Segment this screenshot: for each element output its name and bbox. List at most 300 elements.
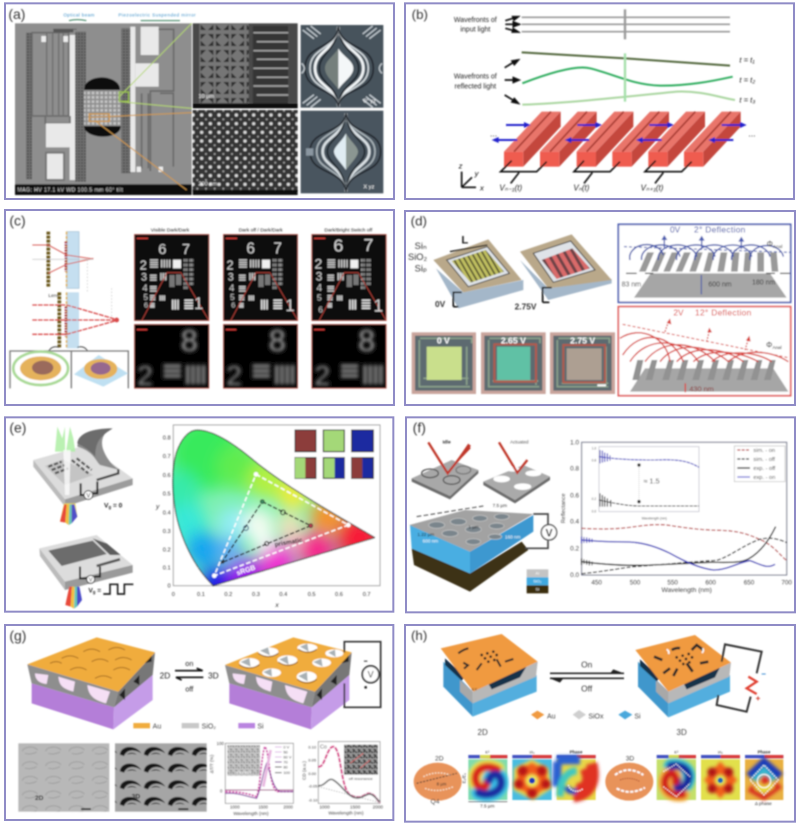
2D intensity map: I/I₀ xyxy=(530,749,535,754)
material legend xyxy=(133,723,264,731)
3D field amplitude map: E² xyxy=(674,749,679,754)
image column 2: 5 xyxy=(230,293,235,302)
spectrum chart with SEM inset: Wavelength (nm) xyxy=(233,811,269,816)
x tick labels: 550 xyxy=(667,579,678,586)
spectrum chart with SEM inset: 1000 xyxy=(230,805,240,810)
layer legend: SiO₂ xyxy=(533,579,542,584)
ellipsis marks xyxy=(490,129,756,139)
spectrum chart with SEM inset: 0 V xyxy=(283,744,290,749)
3D phase map: Phase xyxy=(758,749,771,754)
inset chart: 0.0 xyxy=(592,510,596,514)
voltage label Vg = 0: = 0 xyxy=(111,503,123,510)
x axis ticks: 0.1 xyxy=(197,592,205,598)
material legend: Si xyxy=(634,713,641,720)
device at 2.75V xyxy=(520,234,612,302)
2D disk xyxy=(414,756,462,806)
x axis ticks: 0.5 xyxy=(308,592,316,598)
panel f content xyxy=(409,420,792,594)
micrograph 0 V: 0 V xyxy=(437,336,450,346)
inset chart: ≈ 1.5 xyxy=(643,477,660,486)
incoming rainbow, top xyxy=(60,503,77,525)
y axis ticks: 0.6 xyxy=(163,473,171,479)
switching arrows: 3D xyxy=(208,671,219,681)
image column 3: 2 xyxy=(314,255,322,271)
3D cavity structure xyxy=(635,635,731,717)
box: 12 degree deflection: Anal xyxy=(772,345,782,350)
label: wavefronts of reflected light: Wavefronts of xyxy=(454,74,497,81)
2D field amplitude map: E² xyxy=(485,749,490,754)
image column 2: 4 xyxy=(229,283,234,293)
2D disk: Q4 xyxy=(431,799,440,806)
micrograph 2.65 V: 2.65 V xyxy=(501,336,526,346)
image column 3: 4 xyxy=(317,283,323,294)
CD chart with SEM inset: 1000 xyxy=(319,804,330,809)
x axis ticks: 0.6 xyxy=(335,592,343,598)
panel h label: (h) xyxy=(411,628,427,643)
state labels: 2D xyxy=(478,728,488,737)
spectrum chart with SEM inset: 50 xyxy=(283,749,289,754)
3D phase map: Δ phase xyxy=(755,801,772,806)
3D field amplitude map xyxy=(657,749,696,800)
spectrum chart with SEM inset: 70 xyxy=(283,759,289,764)
SEM overview of device xyxy=(15,23,192,195)
x axis ticks: 0.2 xyxy=(224,592,232,598)
CD chart with SEM inset: 1500 xyxy=(350,804,361,809)
SEM detail: lattice and comb: 10 µm xyxy=(198,94,214,100)
ray diagram, bottom xyxy=(32,288,119,348)
image column 2: 2 xyxy=(226,360,242,391)
panel a: electrostatic MEMS device SEM and interferograms xyxy=(5,3,394,199)
switching arrows: Off xyxy=(581,683,593,693)
image column 3: Dark/Bright Switch off xyxy=(324,227,373,233)
image column 3 xyxy=(312,227,386,391)
simulated off curve xyxy=(582,538,787,574)
sRGB gamut triangle xyxy=(212,472,351,578)
voltage source: V xyxy=(545,527,553,539)
image column 1: 6 xyxy=(144,301,148,310)
reflectance chart xyxy=(561,439,792,594)
panel a content xyxy=(8,6,383,195)
interferogram, bottom xyxy=(301,111,383,193)
material legend: Au xyxy=(547,713,556,720)
inset chart: 1.0 xyxy=(592,446,596,450)
SEM 3D state: 3D xyxy=(132,793,140,800)
image column 2: 7 xyxy=(273,240,282,257)
coordinate axes: z xyxy=(458,161,463,170)
layer labels xyxy=(408,241,428,274)
y tick labels: 0.0 xyxy=(570,572,579,579)
2D phase map xyxy=(557,749,596,800)
2D disk: 2D xyxy=(435,756,444,763)
reflected arrows xyxy=(505,60,519,103)
micrograph 2.75 V xyxy=(550,332,615,394)
rainbow bands, bottom xyxy=(65,587,82,609)
SEM 2D state xyxy=(18,743,109,812)
layered device: 160 nm xyxy=(505,534,521,539)
micrograph 2.65 V xyxy=(481,332,546,394)
x tick labels: 600 xyxy=(705,579,716,586)
y axis ticks: 0.8 xyxy=(163,435,171,441)
experimental off curve xyxy=(582,527,776,565)
voltage circuit xyxy=(717,644,766,712)
image column 3: 7 xyxy=(363,235,373,255)
layered device: 600 nm xyxy=(423,539,438,544)
label: wavefronts of input light: Wavefronts of xyxy=(454,17,497,24)
axis titles xyxy=(155,504,279,609)
material legend: SiOx xyxy=(588,713,604,720)
reflected wavefront at t1 xyxy=(522,52,730,66)
ellipsis marks: ... xyxy=(748,129,756,139)
image column 3: 3 xyxy=(316,269,323,283)
y axis ticks: 0.3 xyxy=(163,529,171,535)
x axis ticks xyxy=(172,592,371,598)
layer labels: Siₚ xyxy=(415,264,427,274)
2D disk: 8 µm xyxy=(437,782,447,787)
time labels xyxy=(739,55,755,104)
2D field amplitude map: E₂/E₁ xyxy=(461,773,466,783)
panel h content xyxy=(411,628,783,809)
box: 2 degree deflection: 180 nm xyxy=(752,279,775,286)
2D intensity map xyxy=(512,749,552,800)
CD chart with SEM inset: -0.10 xyxy=(308,798,318,803)
panel b content xyxy=(412,7,756,193)
panel a label: (a) xyxy=(8,6,25,22)
panel e content xyxy=(9,417,383,609)
panel f: reflectance modulation xyxy=(406,417,795,612)
panel b label: (b) xyxy=(412,7,428,22)
panel g label: (g) xyxy=(9,628,26,644)
x axis ticks: 0.7 xyxy=(363,592,371,598)
3D phase map xyxy=(745,749,783,806)
state labels xyxy=(478,728,687,737)
2D phase map: Phase xyxy=(570,749,583,754)
label: wavefronts of input light: input light xyxy=(460,26,490,33)
device top: lifted film: V xyxy=(86,493,90,499)
time labels: t = t₂ xyxy=(739,75,755,84)
x axis ticks: 0.4 xyxy=(279,592,287,598)
y tick labels: 0.4 xyxy=(570,519,579,526)
layer legend: Al xyxy=(536,571,539,576)
image column 1: 1 xyxy=(194,294,203,313)
image column 1: 2 xyxy=(140,258,147,272)
time labels: t = t₁ xyxy=(739,55,755,64)
chart legend xyxy=(734,446,785,482)
image column 1: 7 xyxy=(182,242,190,258)
image column 3: 5 xyxy=(317,293,322,303)
CD chart with SEM inset: 2000 xyxy=(373,804,383,809)
caption: piezoelectric suspended mirror xyxy=(118,12,196,21)
actuated-state metasurface schematic: Actuated xyxy=(510,439,529,444)
L dimension label: L xyxy=(461,235,468,247)
image column 3: 6 xyxy=(333,236,343,256)
square-wave voltage label: = xyxy=(95,588,101,595)
CD chart with SEM inset xyxy=(302,742,383,815)
x tick labels xyxy=(591,579,792,586)
image column 1: 4 xyxy=(142,283,148,293)
micrograph 2.75 V: 2.75 V xyxy=(570,336,595,346)
rainbow bands, top xyxy=(60,504,77,525)
x axis title: Wavelength (nm) xyxy=(661,587,712,594)
x tick labels: 650 xyxy=(744,579,755,586)
coordinate axes: x xyxy=(479,184,485,193)
CD chart with SEM inset: 0.10 xyxy=(308,744,317,749)
image column 2: 3 xyxy=(228,271,234,283)
SEM detail: nanohole array xyxy=(193,110,298,195)
input wavefront lines xyxy=(522,9,730,39)
3D intensity map xyxy=(701,749,740,800)
y axis ticks: 0.2 xyxy=(163,547,171,553)
spectrum chart with SEM inset xyxy=(209,741,294,816)
3D disk: 3D xyxy=(626,756,634,763)
y axis ticks xyxy=(163,435,171,590)
layer labels: Siₙ xyxy=(415,241,427,251)
layered device: 1.22 µm xyxy=(417,532,434,537)
panel e: reflective color display and chromaticity xyxy=(5,417,393,612)
CIE chromaticity diagram xyxy=(153,417,383,609)
y tick labels xyxy=(570,439,579,579)
chart legend: exp. - on xyxy=(753,475,775,481)
voltage label Vg = 0: V xyxy=(104,503,108,510)
measured gamut triangle xyxy=(221,500,313,564)
measured label: prismatic xyxy=(274,537,304,549)
layer legend xyxy=(527,569,548,593)
box: 12 degree deflection xyxy=(618,307,791,396)
ray diagram, top: Lens xyxy=(48,293,60,299)
caption: optical beam xyxy=(63,12,95,21)
voltage labels: Vₙ₊₁(t) xyxy=(641,184,664,193)
image column 1: 5 xyxy=(143,293,148,302)
box: 12 degree deflection: 12° Deflection xyxy=(695,307,752,317)
ray diagram, top xyxy=(32,232,93,299)
switching arrows: off xyxy=(185,684,194,693)
voltage labels xyxy=(499,184,664,193)
image column 2 xyxy=(223,227,298,391)
image column 3: 2 xyxy=(315,360,330,391)
reflected wavefront at t2 xyxy=(522,68,733,86)
voltage labels xyxy=(435,299,537,312)
voltage labels: Vₙ₋₁(t) xyxy=(499,184,522,193)
SEM detail: lattice and comb xyxy=(193,23,298,108)
inset chart xyxy=(592,446,699,521)
sRGB label: sRGB xyxy=(236,565,256,577)
CD chart with SEM inset: 0.05 xyxy=(308,758,317,763)
CD chart with SEM inset: -0.05 xyxy=(308,784,318,789)
material legend: Si xyxy=(257,724,264,731)
spectrum chart with SEM inset: 80 xyxy=(283,764,289,769)
x tick labels: 700 xyxy=(781,579,792,586)
image column 2: 6 xyxy=(246,240,255,257)
inset chart: 0.8 xyxy=(592,458,596,462)
3D intensity map: I/I₀ xyxy=(718,749,723,754)
box: 2 degree deflection xyxy=(618,224,791,302)
CD chart with SEM inset: CD (a.u.) xyxy=(302,761,307,780)
colour swatches xyxy=(295,430,373,478)
coordinate axes: y xyxy=(474,169,480,178)
image column 2: 1 xyxy=(285,296,295,315)
layer labels: SiO₂ xyxy=(408,252,428,262)
CD chart with SEM inset: 0.00 xyxy=(308,771,317,776)
y tick labels: 0.2 xyxy=(570,545,579,552)
box: 12 degree deflection: Φ xyxy=(766,341,772,350)
y tick labels: 0.6 xyxy=(570,493,579,500)
panel b: wavefront control by moving gratings xyxy=(405,3,794,199)
red grating bars xyxy=(504,112,741,167)
panel d content xyxy=(408,214,791,396)
y axis ticks: 0.7 xyxy=(163,454,171,460)
label: wavefronts of reflected light: reflected light xyxy=(455,83,496,90)
panel e label: (e) xyxy=(9,420,26,436)
image column 2: 8 xyxy=(269,324,286,358)
caption: optical beam: Optical beam xyxy=(63,12,95,17)
CD chart with SEM inset: Wavelength (nm) xyxy=(328,810,364,815)
SEM overview of device: MAG: HV 17.1 kV WD 100.5 mm 60° tilt xyxy=(17,188,123,194)
interferogram, top xyxy=(301,25,383,108)
ellipsis marks: ... xyxy=(490,129,497,139)
inset chart: 0.2 xyxy=(592,497,596,501)
y axis ticks: 0.5 xyxy=(163,491,171,497)
spectrum chart with SEM inset: resonator xyxy=(236,770,252,774)
input arrows xyxy=(505,17,519,32)
box: 2 degree deflection: Anal xyxy=(773,244,782,249)
caption: piezoelectric suspended mirror: Piezoelectric Suspended mirror xyxy=(118,12,196,17)
panel g: 2D to 3D switchable kirigami xyxy=(5,625,393,820)
2D field amplitude map xyxy=(461,749,507,809)
image column 1: 3 xyxy=(141,271,147,283)
metalens insets xyxy=(10,347,128,388)
x axis ticks: 0 xyxy=(172,592,175,598)
raised flaps xyxy=(239,644,343,683)
3D structure xyxy=(225,637,352,729)
panel c label: (c) xyxy=(9,213,26,229)
CD chart with SEM inset: Co xyxy=(320,744,327,750)
spectrum chart with SEM inset: 100 xyxy=(217,741,224,746)
y tick labels: 0.8 xyxy=(570,465,579,472)
box: 2 degree deflection: 600 nm xyxy=(708,282,732,289)
panel g content xyxy=(9,628,383,816)
spectrum chart with SEM inset: 2000 xyxy=(283,805,294,810)
reference vertical line xyxy=(621,53,628,102)
axis titles: x xyxy=(274,602,279,609)
square-wave voltage label: V xyxy=(88,588,93,595)
y tick labels: 1.0 xyxy=(570,439,579,446)
box: 12 degree deflection: 430 nm xyxy=(689,385,714,394)
chart legend: sim. - on xyxy=(753,448,775,454)
panel c: metalens doublet imaging xyxy=(5,210,394,405)
device top: lifted film xyxy=(33,428,133,507)
x tick labels: 500 xyxy=(630,579,641,586)
voltage labels: Vₙ(t) xyxy=(573,184,590,193)
switching arrows: on xyxy=(185,659,193,668)
box: 2 degree deflection: 0V xyxy=(670,225,681,235)
voltage label Vg = 0: g xyxy=(108,505,111,510)
image column 2: 2 xyxy=(226,258,234,272)
square-wave voltage label xyxy=(88,584,133,595)
box: 2 degree deflection: 83 nm xyxy=(622,281,641,288)
y axis title: Reflectance xyxy=(561,493,567,523)
layered device: 1 µm xyxy=(468,524,479,529)
box: 2 degree deflection: Φ xyxy=(767,240,773,249)
panel d: electrically tunable beam deflection xyxy=(405,211,795,405)
voltage labels: 2.75V xyxy=(515,302,537,312)
axis titles: y xyxy=(155,504,160,511)
material legend xyxy=(531,710,641,720)
voltage labels: 0V xyxy=(435,299,446,309)
image column 3: 6 xyxy=(318,305,323,314)
interferogram, top: 0° yz xyxy=(363,99,376,105)
spectrum chart with SEM inset: 1500 xyxy=(258,805,269,810)
flat-state metasurface schematic: Idle xyxy=(443,439,451,444)
material legend: Au xyxy=(153,724,161,731)
simulated on curve xyxy=(582,525,787,561)
interferogram, bottom: X yz xyxy=(363,184,375,190)
state labels: 3D xyxy=(677,728,687,737)
square-wave voltage label: g xyxy=(93,590,96,595)
image column 1 xyxy=(134,227,209,391)
reflected wavefront at t3 xyxy=(522,92,735,105)
layered device xyxy=(409,503,533,592)
2D field amplitude map: 7.5 µm xyxy=(480,804,495,809)
image column 2: 6 xyxy=(231,301,235,310)
experimental on curve xyxy=(582,540,775,570)
image column 3: 1 xyxy=(374,296,383,316)
flat-state metasurface schematic xyxy=(412,439,478,499)
voltage circuit xyxy=(344,642,381,707)
image column 1: 6 xyxy=(158,242,166,258)
spectrum chart with SEM inset: 100 xyxy=(283,770,291,775)
switching arrows: 2D xyxy=(160,671,170,681)
x axis ticks: 0.3 xyxy=(252,592,260,598)
layered device: 7.5 µm xyxy=(493,503,507,508)
coordinate axes xyxy=(458,161,485,193)
chart legend: sim. - off xyxy=(753,457,775,463)
image column 1: 8 xyxy=(181,324,198,358)
image column 1: Visible Dark/Dark xyxy=(151,227,190,233)
x tick labels: 450 xyxy=(591,579,602,586)
switching arrows xyxy=(550,659,624,693)
panel h: vortex beam switching xyxy=(405,625,795,822)
image column 3: 8 xyxy=(358,324,375,358)
image column 1: 2 xyxy=(137,360,153,391)
panel f label: (f) xyxy=(413,420,426,436)
box: 2 degree deflection: 2° Deflection xyxy=(694,225,746,235)
spectrum chart with SEM inset: ΔT/T (%) xyxy=(209,754,214,773)
panel c content xyxy=(9,213,386,391)
device bottom: flat film xyxy=(39,535,133,590)
light beam: green xyxy=(55,427,75,452)
2D structure xyxy=(27,637,155,729)
layer legend: Si xyxy=(536,587,539,592)
switching arrows: On xyxy=(581,659,593,669)
material legend: SiO₂ xyxy=(202,724,216,731)
voltage circuit: V xyxy=(368,670,374,680)
y axis ticks: 0.4 xyxy=(163,511,171,517)
micrograph 0 V xyxy=(412,332,476,394)
CD chart with SEM inset: off resonance xyxy=(349,776,373,781)
actuated-state metasurface schematic xyxy=(483,439,550,503)
2D cavity structure xyxy=(441,634,538,717)
image column 2: Dark off / Dark/Dark xyxy=(239,227,283,233)
device bottom: flat film: V xyxy=(89,577,93,583)
panel d label: (d) xyxy=(411,214,427,229)
3D disk xyxy=(605,756,653,801)
switching arrows xyxy=(160,659,219,693)
spectrum chart with SEM inset: 60 V xyxy=(283,754,292,759)
blue force arrows xyxy=(492,122,747,143)
time labels: t = t₃ xyxy=(739,95,755,104)
SEM 3D state xyxy=(115,743,207,812)
box: 12 degree deflection: 2V xyxy=(673,307,684,317)
chart legend: exp. - off xyxy=(753,466,776,472)
